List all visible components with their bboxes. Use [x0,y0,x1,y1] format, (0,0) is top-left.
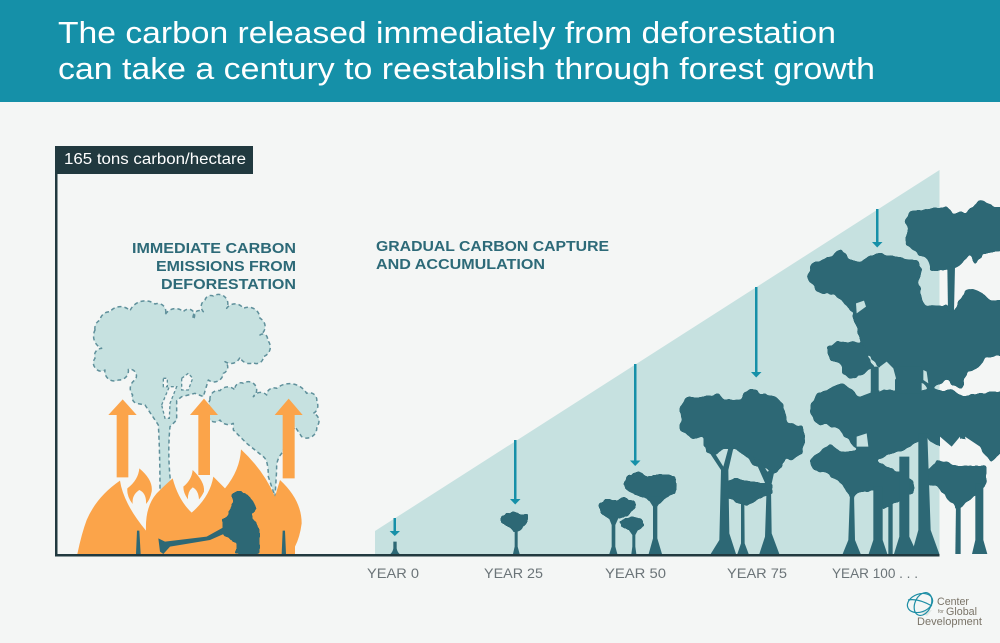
logo text: for [938,609,944,615]
arrow up 3 [275,399,303,478]
y axis label [55,146,253,174]
gaps outside the wedge [940,437,985,465]
year labels: YEAR 50 [605,566,666,581]
arrow year 75 [751,287,762,378]
icon: globe [905,590,935,618]
year 75 trees [680,388,806,554]
logo text: Global [946,606,977,618]
heading: gradual capture: GRADUAL CARBON CAPTURE [376,239,609,255]
year 100 forest silhouette [807,200,1000,554]
fallen burning tree [158,491,260,554]
carbon accumulation wedge [375,170,940,555]
y axis label: 165 tons carbon/hectare [64,151,246,168]
logo: Center for Global Development [905,590,982,628]
year 50 tree small middle [619,517,644,554]
small flame left [127,468,152,504]
smoke cloud: small [209,382,319,497]
year labels: YEAR 25 [484,566,543,581]
panel: immediate emissions from fire [77,294,319,554]
header banner [0,0,1000,102]
chart axes [55,174,940,556]
flames [77,449,302,554]
year labels [367,566,918,581]
gaps in canopy [853,301,928,447]
year 50 tree small left [598,497,636,554]
heading: immediate emissions: EMISSIONS FROM [156,259,296,275]
small flame right [183,470,204,499]
heading: gradual capture [376,239,609,273]
title: can take a century to reestablish through forest growth [58,51,875,86]
arrow year 100 [872,209,882,248]
tree stumps [136,531,286,554]
smoke gaps between branches [162,373,193,418]
title [58,15,875,86]
heading: immediate emissions: DEFORESTATION [161,277,296,293]
arrow up 2 [190,399,218,475]
smoke cloud: large [93,294,270,493]
arrow year 50 [630,364,640,466]
title: The carbon released immediately from deforestation [58,15,836,50]
year labels: YEAR 0 [367,566,419,581]
heading: gradual capture: AND ACCUMULATION [376,257,545,273]
arrow up 1 [108,399,137,477]
year labels: YEAR 75 [727,566,787,581]
year 25 tree [500,512,528,554]
year 50 tree tall [623,471,677,554]
heading: immediate emissions [132,241,296,293]
heading: immediate emissions: IMMEDIATE CARBON [132,241,296,257]
logo text: Center [937,596,969,608]
year labels: YEAR 100 . . . [832,566,918,581]
logo text [917,596,982,628]
trees: years 0 to 50 [390,471,677,554]
trees: years 75 and 100 [680,200,1000,554]
year 0 seedling [390,542,400,554]
carbon arrows [390,209,882,536]
arrow year 0 [390,518,400,536]
logo text: Development [917,616,982,628]
arrow year 25 [510,440,520,504]
